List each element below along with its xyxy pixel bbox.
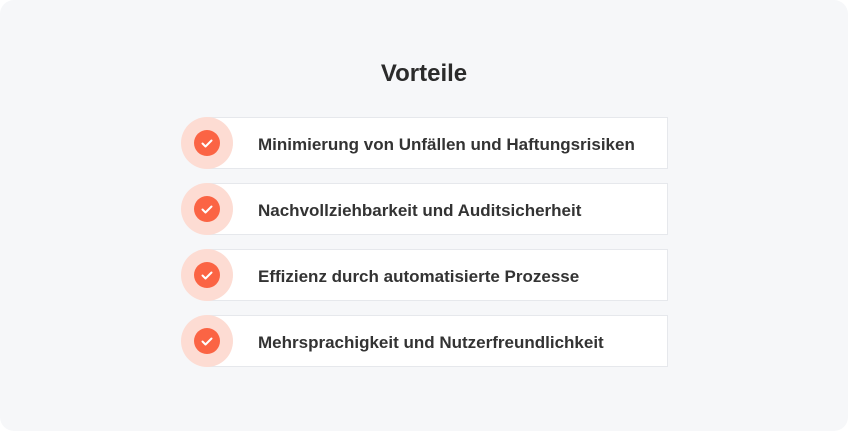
icon: check xyxy=(181,183,233,235)
icon: check xyxy=(181,117,233,169)
row 2 xyxy=(181,183,668,235)
text: Effizienz durch automatisierte Prozesse xyxy=(258,267,579,286)
row 1 xyxy=(181,117,668,169)
icon: check xyxy=(181,315,233,367)
icon: check xyxy=(181,249,233,301)
title: Vorteile xyxy=(381,60,467,87)
row 4 xyxy=(181,315,668,367)
text: Nachvollziehbarkeit und Auditsicherheit xyxy=(258,201,581,220)
row 3 xyxy=(181,249,668,301)
text: Minimierung von Unfällen und Haftungsrisiken xyxy=(258,135,635,154)
text: Mehrsprachigkeit und Nutzerfreundlichkeit xyxy=(258,333,604,352)
